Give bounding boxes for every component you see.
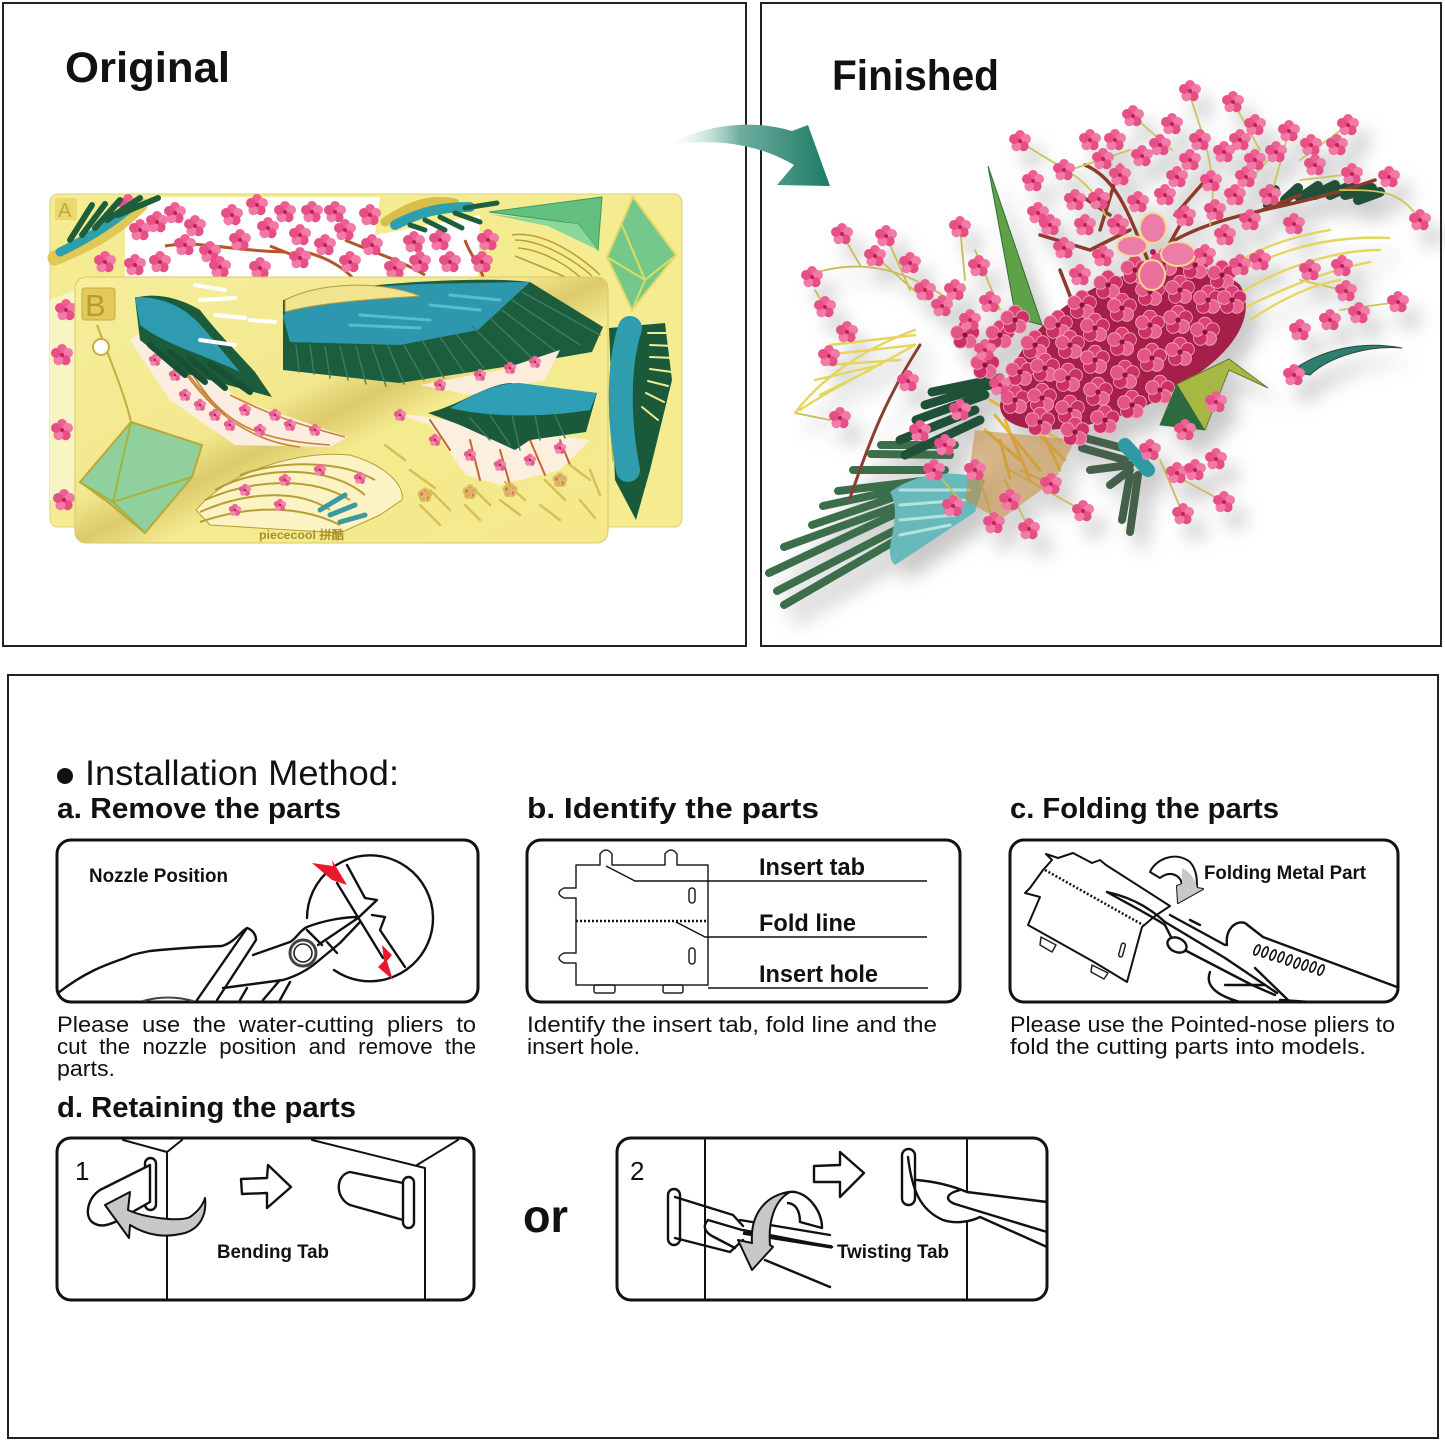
crane orange body lower — [965, 430, 1075, 520]
step d diagram 1: bending tab: 1 — [75, 1156, 89, 1186]
large top flower — [1117, 213, 1195, 290]
step d diagram 1: bending tab: Bending Tab — [217, 1242, 329, 1263]
step a diagram: pliers: Nozzle Position — [89, 866, 228, 887]
green kite lower left — [80, 325, 202, 533]
sheet A — [50, 194, 682, 527]
heading: Original: Original — [65, 44, 230, 92]
panel: installation method — [8, 675, 1438, 1438]
heading: Installation Method: Installation Method: — [85, 754, 399, 793]
step a text: Please use the water-cutting pliers to — [57, 1012, 476, 1037]
or label: or — [523, 1190, 568, 1242]
step c text: fold the cutting parts into models. — [1010, 1034, 1366, 1059]
step c diagram: folding pliers: Folding Metal Part — [1204, 863, 1367, 884]
green plane top — [489, 197, 602, 250]
step b diagram: identify part: Insert hole — [759, 961, 878, 988]
big wing — [283, 280, 603, 395]
step d diagram 2: twisting tab — [617, 1138, 1047, 1300]
lace of left wing — [130, 325, 348, 447]
step d heading: d. Retaining the parts — [57, 1092, 356, 1124]
step a text: cut the nozzle position and remove the — [57, 1034, 476, 1059]
sheet B — [75, 277, 608, 543]
panel: original — [3, 3, 746, 646]
step a diagram: pliers — [57, 840, 478, 1002]
lower left wing — [769, 445, 985, 605]
step b text — [527, 1012, 937, 1059]
brand text: piececool 拼酷 — [259, 527, 344, 542]
right wing sheet A — [609, 323, 674, 520]
yellow lace wings — [795, 230, 1389, 480]
sheet label A — [55, 198, 77, 222]
panel: finished — [761, 3, 1441, 646]
lower center small wing — [1082, 438, 1148, 532]
metal sheets A and B — [50, 194, 682, 543]
tall green triangle — [988, 166, 1042, 325]
stems — [795, 95, 1420, 529]
small parts rows — [195, 285, 600, 525]
central blossom mass — [951, 247, 1246, 445]
step c text — [1010, 1012, 1395, 1059]
lower left dark feathers — [900, 378, 1000, 455]
lace wing bottom — [196, 454, 402, 533]
arrow: original to finished — [665, 125, 830, 186]
step b diagram: identify part: Fold line — [759, 910, 856, 937]
green kite right — [607, 197, 676, 310]
step b text: insert hole. — [527, 1034, 640, 1059]
step d diagram 2: twisting tab: Twisting Tab — [837, 1242, 949, 1263]
sheet label B: B — [85, 288, 106, 323]
crane head and neck — [1160, 359, 1268, 430]
step d diagram 1: bending tab — [57, 1138, 474, 1300]
heading: Finished: Finished — [832, 52, 999, 100]
step c diagram: folding pliers — [1010, 840, 1398, 1002]
step d diagram 2: twisting tab: 2 — [630, 1156, 644, 1186]
right dark leaves — [1268, 185, 1380, 205]
step b heading: b. Identify the parts — [527, 793, 819, 825]
step a heading: a. Remove the parts — [57, 793, 341, 825]
sheet label B — [82, 288, 115, 323]
step c heading: c. Folding the parts — [1010, 793, 1279, 825]
left wing — [135, 296, 272, 397]
small wing top left — [55, 198, 158, 258]
finished flower crane model — [769, 80, 1431, 605]
step b diagram: identify part: Insert tab — [759, 854, 865, 881]
step a text — [57, 1012, 476, 1081]
sheet label A: A — [58, 200, 72, 222]
small wing top center — [385, 201, 497, 230]
small blossoms — [801, 80, 1431, 539]
step b text: Identify the insert tab, fold line and the — [527, 1012, 937, 1037]
step c text: Please use the Pointed-nose pliers to — [1010, 1012, 1395, 1037]
step a text: parts. — [57, 1056, 115, 1081]
thin right wing — [1290, 345, 1402, 375]
lace wing top right — [512, 234, 600, 277]
step b diagram: identify part — [527, 840, 960, 1002]
third wing — [390, 383, 597, 485]
